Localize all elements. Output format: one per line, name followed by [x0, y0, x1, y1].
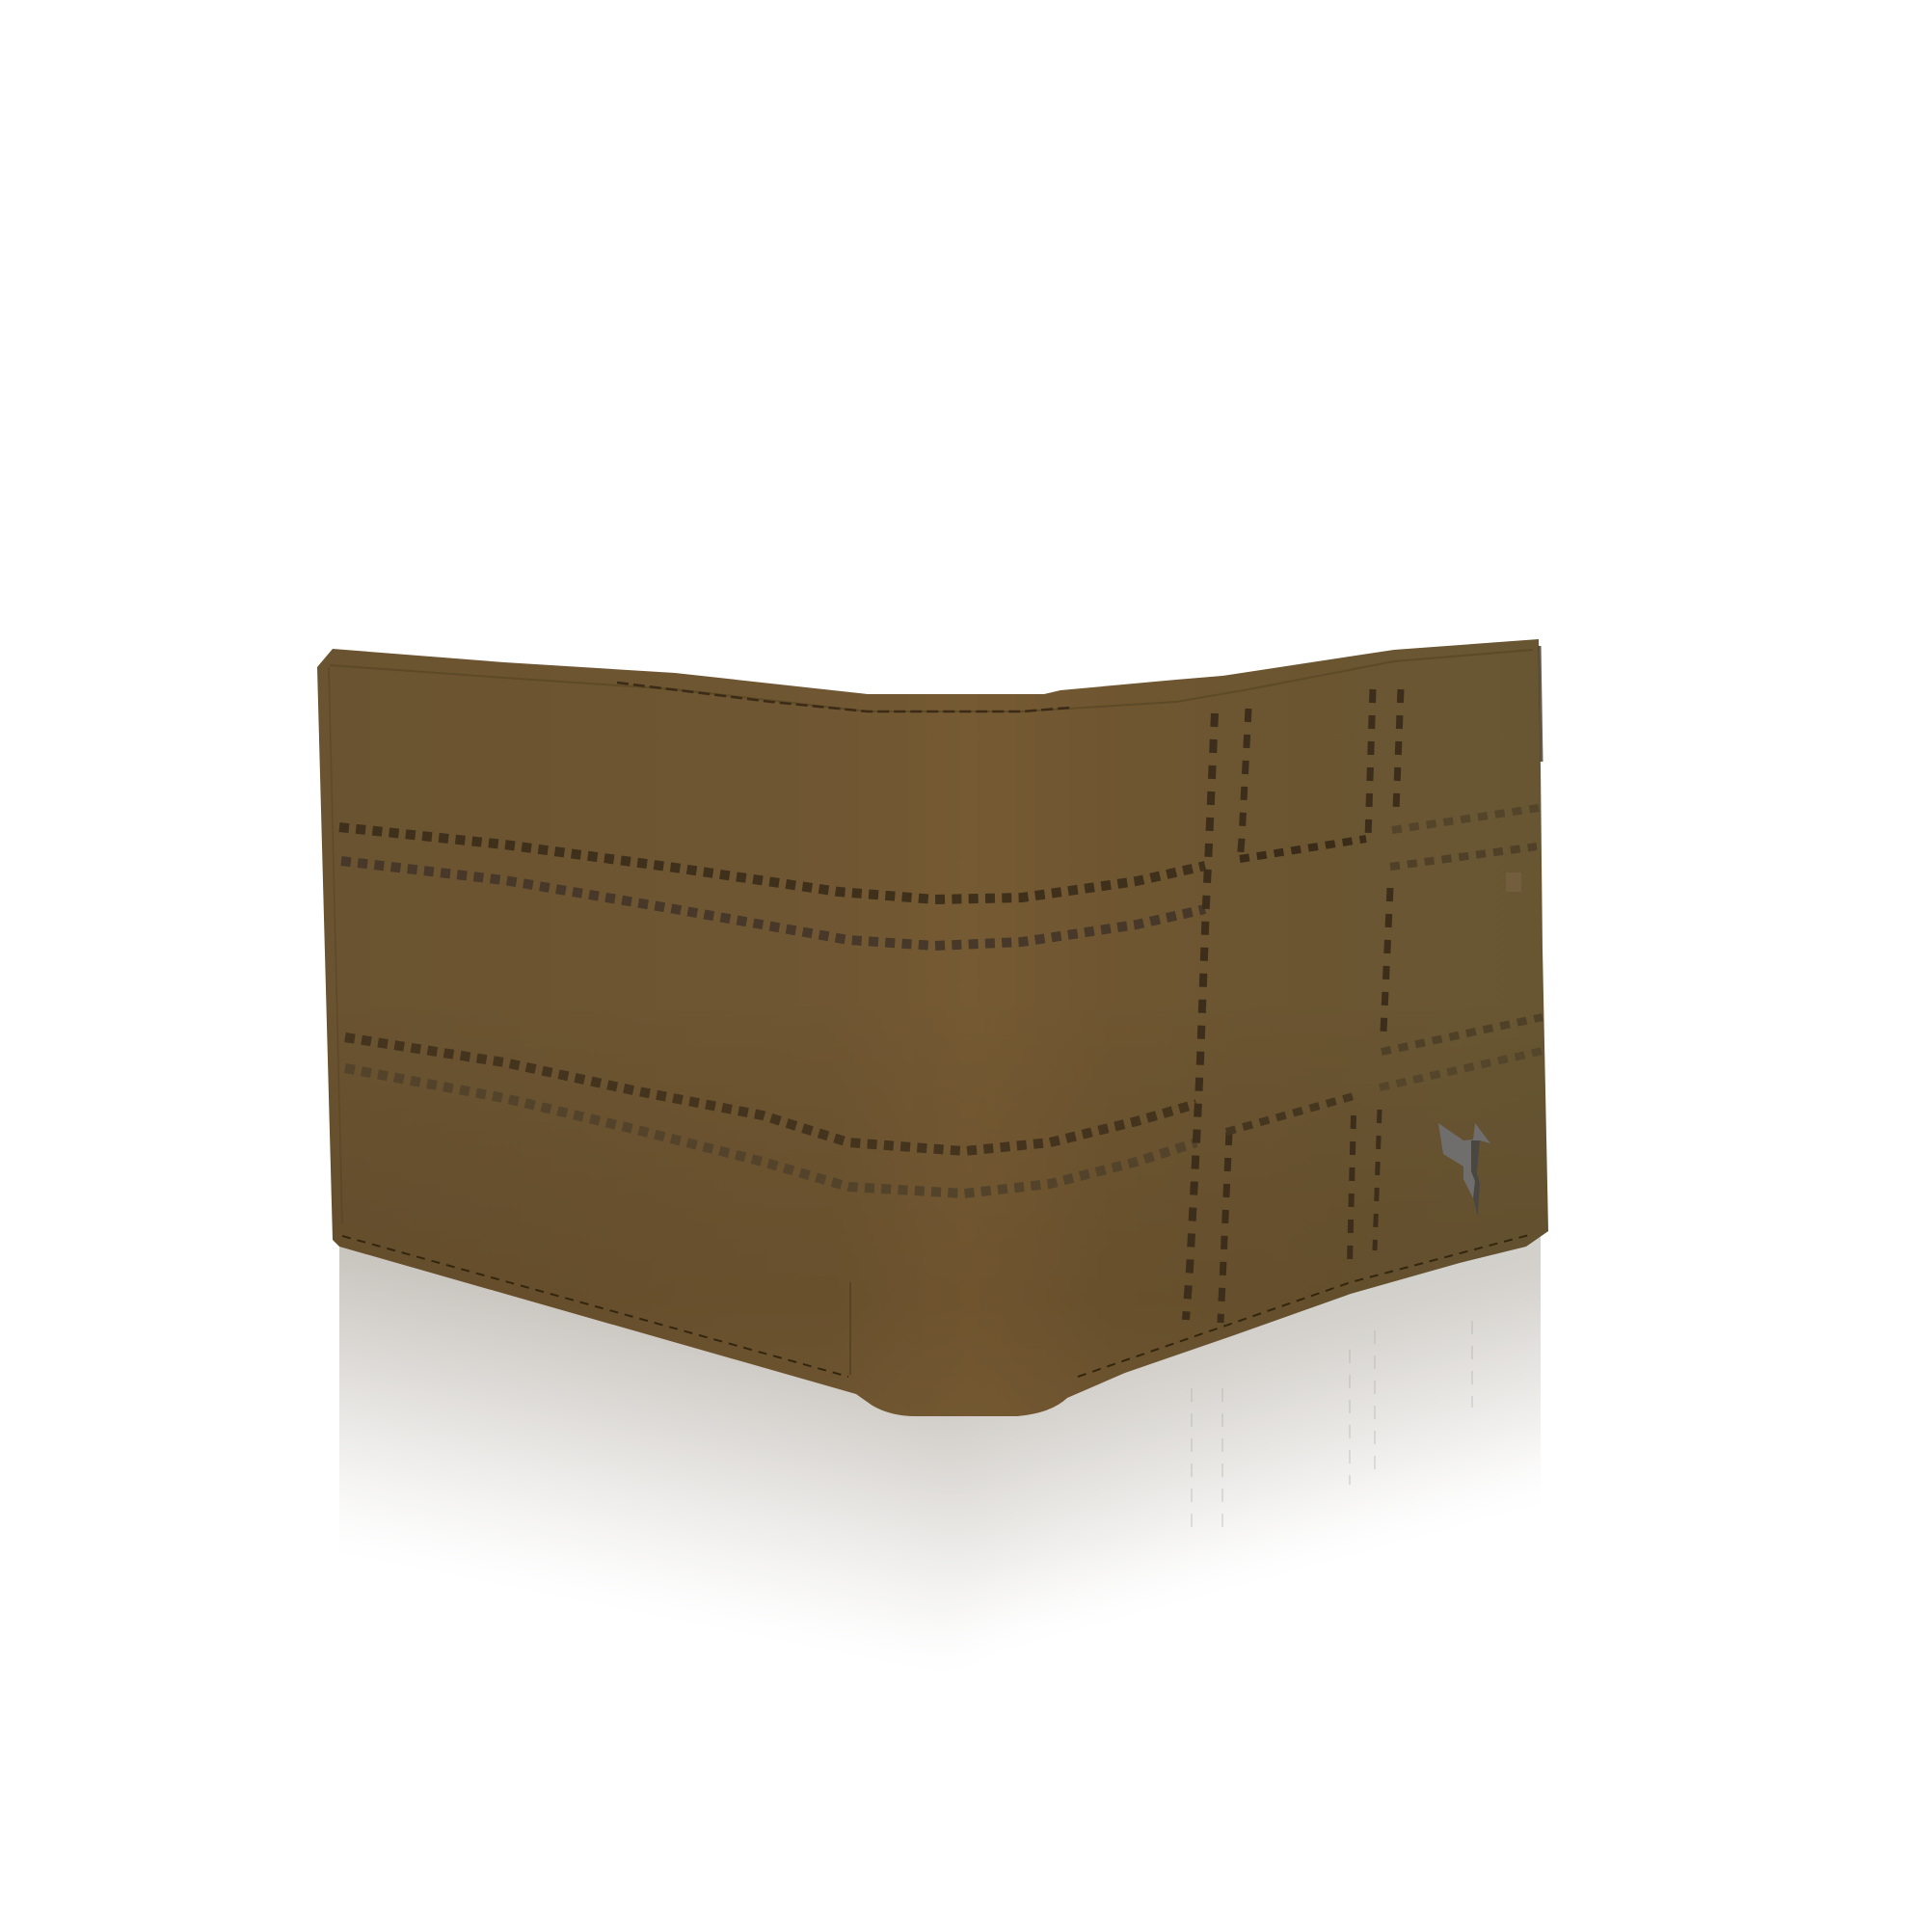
small scuff mark — [1506, 872, 1521, 892]
right panel vertical perforation columns — [1186, 689, 1401, 1323]
icon: origami bird logo — [1438, 1123, 1490, 1217]
reflected stitch lines — [1192, 1321, 1472, 1533]
right panel horizontal perforation rows — [1226, 808, 1543, 1132]
top edge binding and stitch — [329, 646, 1542, 1224]
product photo: bifold wallet on white — [317, 639, 1548, 1616]
floor reflection — [339, 1236, 1541, 1616]
bottom edge stitch — [342, 1234, 1533, 1377]
fold highlight — [829, 675, 1109, 1427]
wallet body — [317, 639, 1548, 1427]
left panel perforation rows — [339, 827, 1205, 1194]
